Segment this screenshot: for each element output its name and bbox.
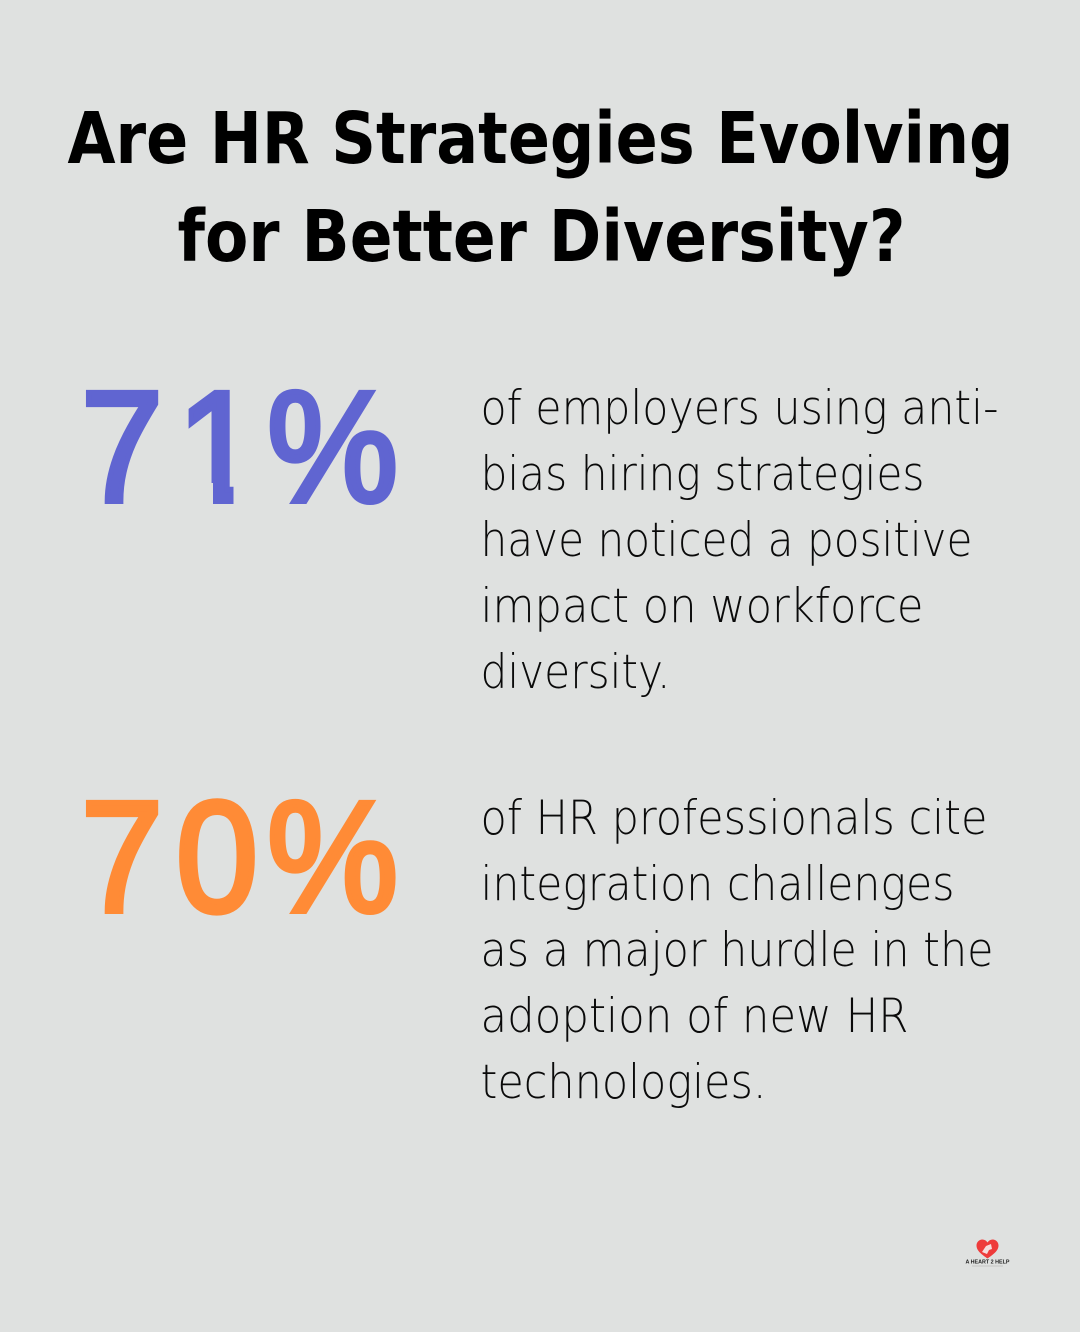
- text block: 71% description: have noticed a positive: [480, 513, 972, 568]
- text block: 71% description: of employers using anti-: [480, 381, 998, 436]
- text block: 71% description: bias hiring strategies: [480, 447, 924, 502]
- text block: 70% description: [480, 791, 994, 1110]
- text block: 70% description: technologies.: [480, 1055, 766, 1110]
- text block: 71% description: diversity.: [480, 645, 670, 700]
- logo: A Heart 2 Help: A HEART 2 HELP: [966, 1260, 1010, 1266]
- stat: 70%: 70%: [81, 770, 398, 945]
- logo: A Heart 2 Help: [966, 1240, 1010, 1266]
- text block: 70% description: adoption of new HR: [480, 989, 908, 1044]
- text block: 70% description: integration challenges: [480, 857, 954, 912]
- text block: 70% description: as a major hurdle in the: [480, 923, 994, 978]
- title: [68, 97, 1014, 278]
- title: for Better Diversity?: [178, 195, 906, 278]
- text block: 71% description: [480, 381, 998, 700]
- text block: 71% description: impact on workforce: [480, 579, 924, 634]
- icon: heart: [976, 1240, 998, 1258]
- text block: 70% description: of HR professionals cite: [480, 791, 988, 846]
- stat: 71%: 71%: [81, 360, 398, 535]
